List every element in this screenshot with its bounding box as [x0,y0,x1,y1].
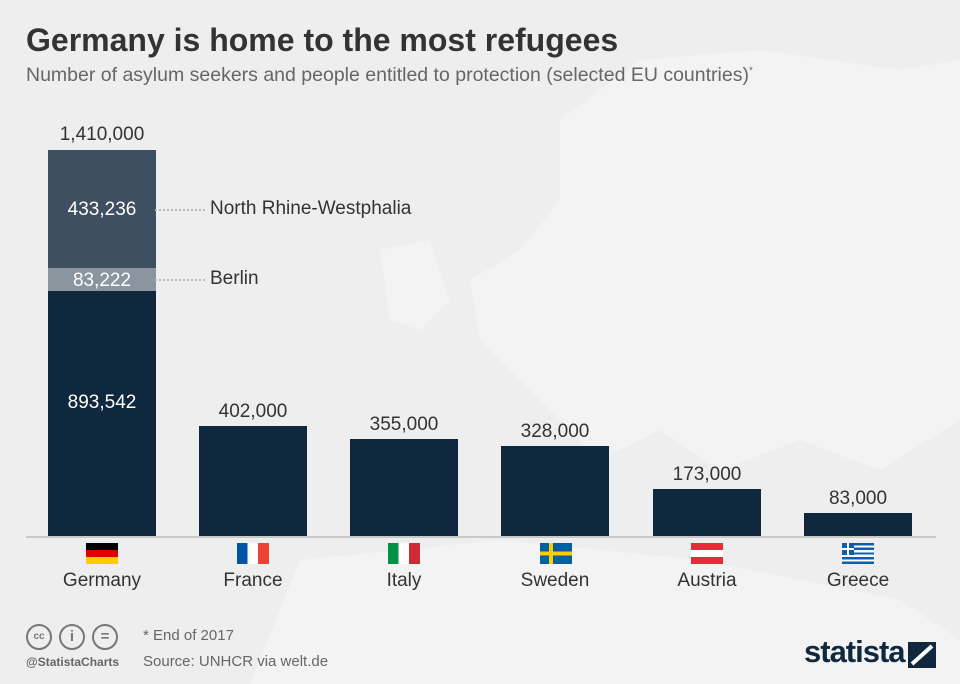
bar chart: 1,410,000 [60,124,144,145]
text: France [223,570,283,591]
flag: Germany [86,543,118,564]
bar chart: 83,000 [829,488,887,509]
flag: Greece [842,543,874,564]
bar chart: 328,000 [521,421,589,442]
bar chart: 173,000 [673,464,741,485]
text: Sweden [521,570,589,591]
footnote: * End of 2017 [143,627,234,644]
source: Source: UNHCR via welt.de [143,653,328,670]
handle: @StatistaCharts [26,655,119,669]
callout: Berlin: Berlin [210,268,259,289]
icons: cc license: = [101,628,109,645]
text: Austria [677,570,737,591]
bar: Germany: 893,542 [68,392,136,413]
title: Germany is home to the most refugees [26,22,618,58]
logo: statista: statista [804,634,905,669]
flag: France [237,543,269,564]
text: Greece [827,570,889,591]
flag: Italy [388,543,420,564]
text: Italy [387,570,421,591]
icons: cc license: cc [33,631,45,642]
bar chart: 402,000 [219,401,287,422]
bar: Italy [350,439,458,536]
flag: Austria [691,543,723,564]
bar: Germany: 433,236 [68,199,136,220]
icons: cc license: i [70,628,74,645]
bar: Sweden [501,446,609,536]
flag: Sweden [540,543,572,564]
country labels: Germany [63,570,141,591]
bar: Austria [653,489,761,536]
subtitle: Number of asylum seekers and people entitled to protection (selected EU countries)* [26,64,753,86]
bar: France [199,426,307,536]
bar: Germany: 83,222 [73,270,131,291]
bar chart [26,124,936,538]
callout: NRW: North Rhine-Westphalia [210,198,411,219]
flags [86,543,874,564]
bar: Germany [48,150,156,536]
bar: Greece [804,513,912,536]
icons: cc license [26,624,118,650]
bar chart: 355,000 [370,414,438,435]
